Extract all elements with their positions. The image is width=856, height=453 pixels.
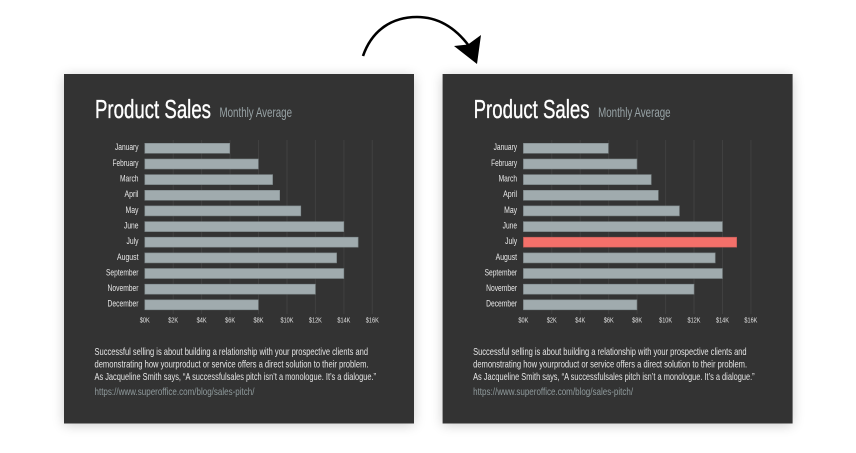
bar chart: monthly sales, July in coral: December — [486, 299, 517, 309]
bar chart: monthly sales, July in coral: $10K — [659, 318, 672, 324]
subheading: Monthly Average: Monthly Average — [220, 104, 292, 120]
heading: Product Sales: Product Sales — [95, 94, 211, 124]
bar chart: monthly sales, July in coral: August — [496, 252, 517, 262]
bar chart: monthly sales, July in coral: February — [491, 158, 517, 168]
bar chart: monthly sales: $6K — [225, 318, 235, 324]
bar chart: monthly sales: $0K — [140, 318, 150, 324]
subheading: Monthly Average: Monthly Average — [598, 104, 671, 120]
bar chart: monthly sales, July in coral: $8K — [632, 318, 642, 324]
bar chart: monthly sales, July in coral: $14K — [716, 318, 729, 324]
bar chart: monthly sales, July in coral: $0K — [518, 318, 529, 324]
bar chart: monthly sales: August — [117, 252, 139, 262]
text block: description: demonstrating how yourproduct or service offers a direct solution to their problem. — [94, 358, 368, 370]
bar chart: monthly sales: December — [108, 299, 139, 309]
bar chart: monthly sales: $2K — [168, 318, 178, 324]
bar chart: monthly sales: June — [124, 220, 138, 230]
panel: chart with July highlighted — [443, 74, 793, 425]
bar chart: monthly sales, July in coral: May — [504, 205, 517, 215]
text block: description: demonstrating how yourproduct or service offers a direct solution to their problem. — [473, 358, 747, 370]
panel: original chart — [64, 74, 414, 425]
bar chart: monthly sales, July in coral: $12K — [688, 318, 701, 324]
bar chart: monthly sales, July in coral: $4K — [575, 318, 585, 324]
bar chart: monthly sales, July in coral: $2K — [547, 318, 557, 324]
bar chart: monthly sales — [106, 140, 379, 324]
source link: https://www.superoffice.com/blog/sales-pitch/ — [473, 386, 633, 398]
source link: https://www.superoffice.com/blog/sales-pitch/ — [94, 386, 255, 398]
bar chart: monthly sales: April — [124, 189, 138, 199]
bar chart: monthly sales, July in coral: November — [486, 283, 517, 293]
bar chart: monthly sales, July in coral — [485, 140, 758, 324]
bar chart: monthly sales, July in coral: March — [499, 174, 517, 184]
bar chart: monthly sales: $10K — [280, 318, 294, 324]
bar chart: monthly sales: July — [126, 236, 139, 246]
bar chart: monthly sales, July in coral: $16K — [744, 318, 758, 324]
bar chart: monthly sales: November — [108, 283, 139, 293]
text block: description: Successful selling is about building a relationship with your prospective clients and — [473, 346, 747, 358]
bar chart: monthly sales: $14K — [337, 318, 351, 324]
text block: description — [473, 346, 755, 383]
arrow: curved black arrow between panels — [363, 17, 481, 64]
highlighted bar: July — [523, 237, 737, 247]
bar chart: monthly sales: $4K — [197, 318, 207, 324]
bar chart: monthly sales, July in coral: September — [485, 267, 517, 277]
bar chart: monthly sales: February — [112, 158, 139, 168]
bar chart: monthly sales: $12K — [309, 318, 322, 324]
bar chart: monthly sales: $8K — [254, 318, 264, 324]
bar chart: monthly sales, July in coral: April — [503, 189, 517, 199]
bar chart: monthly sales: $16K — [366, 318, 379, 324]
bar chart: monthly sales, July in coral: July — [505, 236, 517, 246]
heading: Product Sales: Product Sales — [474, 94, 590, 124]
bar chart: monthly sales, July in coral: January — [494, 142, 517, 152]
text block: description — [94, 346, 376, 383]
bar chart: monthly sales: September — [106, 267, 138, 277]
bar chart: monthly sales, July in coral: June — [503, 220, 517, 230]
bar chart: monthly sales: March — [120, 174, 138, 184]
bar chart: monthly sales: May — [126, 205, 139, 215]
text block: description: As Jacqueline Smith says, “A successfulsales pitch isn’t a monologue. It’s a dialogue.” — [94, 371, 376, 383]
bar chart: monthly sales: January — [115, 142, 139, 152]
bar chart: monthly sales, July in coral: $6K — [604, 318, 614, 324]
text block: description: Successful selling is about building a relationship with your prospective clients and — [94, 346, 368, 358]
